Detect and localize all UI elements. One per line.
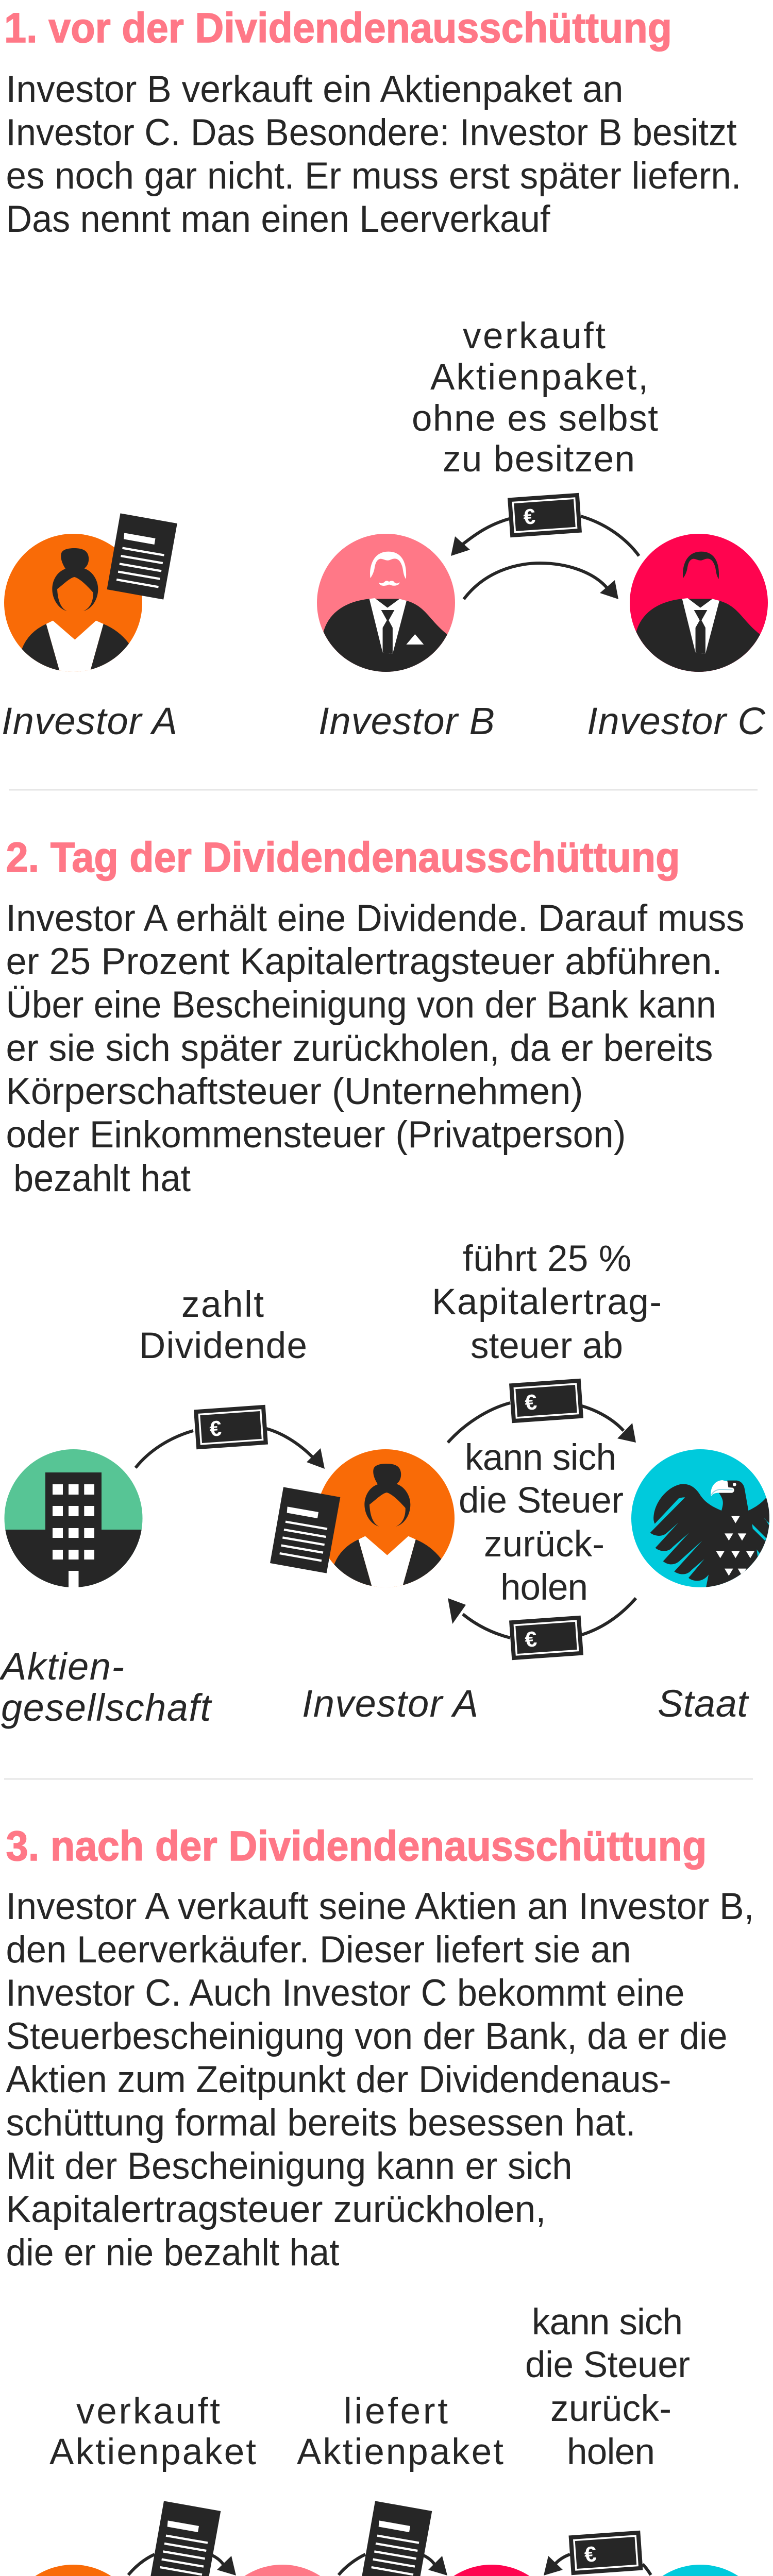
label: kann sich die Steuer zurückholen: die Steuer bbox=[459, 1480, 624, 1521]
label: führt 25 % Kapitalertragsteuer ab: Kapitalertrag- bbox=[432, 1282, 662, 1323]
label: verkauft Aktienpaket: verkauft bbox=[463, 316, 606, 357]
label: führt 25 % Kapitalertragsteuer ab bbox=[432, 1239, 662, 1366]
label: verkauft Aktienpaket bbox=[412, 316, 658, 480]
arrow: refund from state with banknote bbox=[448, 1598, 636, 1660]
icon: Investor A bbox=[4, 534, 142, 672]
icon: Investor C bbox=[630, 534, 768, 672]
text block 1: es noch gar nicht. Er muss erst später liefern. bbox=[6, 155, 741, 197]
icon: Investor A bbox=[316, 1449, 455, 1588]
text block 3: die er nie bezahlt hat bbox=[6, 2232, 339, 2274]
heading 3: 3. nach der Dividendenausschüttung bbox=[6, 1823, 707, 1870]
heading 2: 2. Tag der Dividendenausschüttung bbox=[6, 834, 680, 881]
label: verkauft Aktienpaket: Aktienpaket bbox=[49, 2432, 256, 2472]
text block 3: Investor C. Auch Investor C bekommt eine bbox=[6, 1972, 684, 2014]
text block 3: Steuerbescheinigung von der Bank, da er die bbox=[6, 2015, 728, 2057]
label: kann sich die Steuer zurückholen: kann sich bbox=[532, 2302, 683, 2343]
label: verkauft Aktienpaket: Aktienpaket, bbox=[430, 357, 648, 398]
icon: Aktiengesellschaft building bbox=[4, 1449, 142, 1588]
arrow: state to C with banknote bbox=[544, 2531, 651, 2575]
arrow: B to C with document bbox=[339, 2501, 447, 2576]
arrow: state to C with banknote: € bbox=[583, 2541, 597, 2567]
label: zahlt Dividende: Dividende bbox=[139, 1326, 307, 1366]
label: verkauft Aktienpaket: verkauft bbox=[76, 2391, 220, 2432]
label: kann sich die Steuer zurückholen: kann sich bbox=[465, 1437, 616, 1478]
text block 3: schüttung formal bereits besessen hat. bbox=[6, 2102, 636, 2144]
label: Investor C: Investor C bbox=[587, 700, 766, 742]
icon: Investor A bbox=[4, 2565, 142, 2576]
label: Investor A: Investor A bbox=[2, 700, 177, 742]
text block 3: Kapitalertragsteuer zurückholen, bbox=[6, 2189, 546, 2230]
panel: 3. nach der Dividendenausschüttung bbox=[3, 1823, 769, 2576]
label: verkauft Aktienpaket: zu besitzen bbox=[443, 439, 635, 480]
text block 2: er 25 Prozent Kapitalertragsteuer abführen. bbox=[6, 941, 722, 982]
label: verkauft Aktienpaket: ohne es selbst bbox=[412, 398, 658, 439]
icon: Investor C bbox=[423, 2565, 561, 2576]
text block 3: den Leerverkäufer. Dieser liefert sie an bbox=[6, 1929, 631, 1971]
icon: Staat eagle bbox=[631, 2565, 769, 2576]
text block 2: Körperschaftsteuer (Unternehmen) bbox=[6, 1071, 583, 1112]
icon: Staat eagle bbox=[631, 1449, 769, 1587]
arrow: A to B with document bbox=[128, 2501, 236, 2576]
label: Aktiengesellschaft: gesellschaft bbox=[1, 1686, 212, 1729]
label: kann sich die Steuer zurückholen: die Steuer bbox=[525, 2345, 690, 2385]
label: führt 25 % Kapitalertragsteuer ab: steuer ab bbox=[470, 1326, 623, 1366]
arrow: dividend with banknote: € bbox=[209, 1416, 222, 1441]
text block 3: Investor A verkauft seine Aktien an Investor B, bbox=[6, 1886, 754, 1927]
text block 3: Aktien zum Zeitpunkt der Dividendenaus- bbox=[6, 2059, 671, 2100]
label: liefert Aktienpaket: Aktienpaket bbox=[297, 2432, 503, 2472]
text block 2: Investor A erhält eine Dividende. Darauf muss bbox=[6, 897, 744, 939]
text block 3: Mit der Bescheinigung kann er sich bbox=[6, 2145, 572, 2187]
panel: 1. vor der Dividendenausschüttung bbox=[2, 5, 768, 742]
label: kann sich die Steuer zurückholen: holen bbox=[567, 2432, 655, 2472]
label: Aktiengesellschaft: Aktien- bbox=[0, 1645, 124, 1688]
label: kann sich die Steuer zurückholen: zurück- bbox=[550, 2388, 671, 2429]
label: Investor B: Investor B bbox=[318, 700, 495, 742]
arrow: dividend with banknote bbox=[136, 1405, 325, 1469]
text block 1 bbox=[6, 69, 741, 240]
text block 2: bezahlt hat bbox=[13, 1158, 191, 1199]
arrow: B to C bbox=[464, 563, 618, 599]
text block 2 bbox=[6, 897, 744, 1199]
label: zahlt Dividende bbox=[139, 1284, 307, 1366]
text block 1: Investor C. Das Besondere: Investor B besitzt bbox=[6, 112, 737, 154]
label: liefert Aktienpaket bbox=[297, 2391, 503, 2472]
text block 1: Das nennt man einen Leerverkauf bbox=[6, 198, 550, 240]
label: verkauft Aktienpaket bbox=[49, 2391, 256, 2472]
label: Aktiengesellschaft bbox=[0, 1645, 212, 1729]
label: Investor A: Investor A bbox=[302, 1682, 478, 1725]
text block 3 bbox=[6, 1886, 754, 2274]
heading 1: 1. vor der Dividendenausschüttung bbox=[4, 5, 672, 52]
arrow: C to B with banknote: € bbox=[523, 504, 536, 529]
label: zahlt Dividende: zahlt bbox=[181, 1284, 264, 1325]
text block 2: Über eine Bescheinigung von der Bank kann bbox=[6, 984, 716, 1026]
label: führt 25 % Kapitalertragsteuer ab: führt 25 % bbox=[463, 1239, 631, 1279]
text block 2: er sie sich später zurückholen, da er bereits bbox=[6, 1027, 713, 1069]
label: kann sich die Steuer zurückholen bbox=[525, 2302, 690, 2472]
icon: Investor B bbox=[213, 2565, 351, 2576]
arrow: refund from state with banknote: € bbox=[524, 1626, 537, 1652]
text block 1: Investor B verkauft ein Aktienpaket an bbox=[6, 69, 624, 110]
text block 2: oder Einkommensteuer (Privatperson) bbox=[6, 1114, 626, 1156]
label: kann sich die Steuer zurückholen: holen bbox=[500, 1567, 588, 1608]
label: kann sich die Steuer zurückholen: zurück- bbox=[484, 1524, 604, 1565]
label: Staat: Staat bbox=[658, 1682, 749, 1725]
label: liefert Aktienpaket: liefert bbox=[344, 2391, 448, 2432]
icon: document bbox=[107, 513, 177, 600]
icon: document bbox=[270, 1487, 340, 1573]
arrow: C to B with banknote bbox=[451, 493, 639, 556]
panel: 2. Tag der Dividendenausschüttung bbox=[0, 834, 769, 1729]
label: kann sich die Steuer zurückholen bbox=[459, 1437, 624, 1608]
arrow: tax to state with banknote: € bbox=[524, 1389, 537, 1415]
arrow: tax to state with banknote bbox=[448, 1379, 636, 1443]
icon: Investor B bbox=[317, 534, 455, 672]
